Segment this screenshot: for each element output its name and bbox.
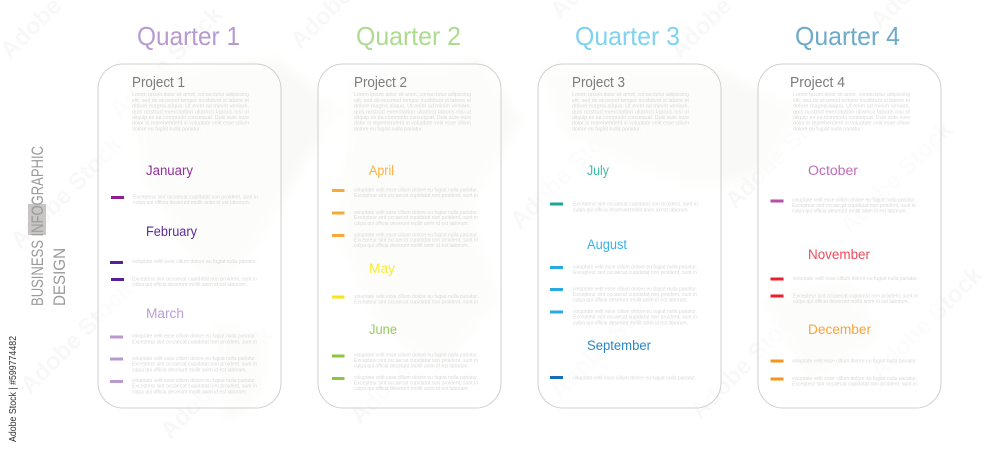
marker: february 2 xyxy=(111,278,124,281)
august notes: Excepteur sint occaecat cupidatat non proident, sunt in xyxy=(573,292,697,298)
project description: dolor in reprehenderit in voluptate velit esse cillum xyxy=(132,120,249,126)
april notes: voluptate velit esse cillum dolore eu fugiat nulla pariatur. xyxy=(354,188,478,194)
november notes: Excepteur sint occaecat cupidatat non proident, sunt in xyxy=(793,294,918,300)
march notes: Excepteur sint occaecat cupidatat non proident, sunt in xyxy=(132,340,257,346)
background: world map and watermark: Adobe Stock xyxy=(545,281,668,404)
project description: dolore magna aliqua. Ut enim ad minim veniam, xyxy=(793,104,910,110)
background: world map and watermark: Adobe Stock xyxy=(685,301,808,424)
marker: february 1 xyxy=(110,261,123,264)
february notes xyxy=(132,259,257,288)
background: world map and watermark: Adobe Stock xyxy=(505,111,628,234)
august notes: voluptate velit esse cillum dolore eu fugiat nulla pariatur. xyxy=(573,264,697,270)
june notes: culpa qui officia deserunt mollit anim id est laborum. xyxy=(354,364,469,370)
markers: april xyxy=(332,189,344,237)
april notes xyxy=(354,188,478,249)
project description: Lorem ipsum dolor sit amet, consectetur adipiscing xyxy=(132,92,249,98)
project description xyxy=(354,92,472,132)
january notes: Excepteur sint occaecat cupidatat non proident, sunt in xyxy=(133,194,258,200)
project title: Project 3 xyxy=(572,75,625,91)
panel: project 1 xyxy=(98,64,281,408)
background: world map and watermark: Adobe Stock xyxy=(105,1,228,124)
project description: aliquip ex ea commodo consequat. Duis aute irure xyxy=(793,115,910,121)
june notes: voluptate velit esse cillum dolore eu fugiat nulla pariatur. xyxy=(354,375,478,381)
april notes: voluptate velit esse cillum dolore eu fugiat nulla pariatur. xyxy=(354,232,478,238)
project description: dolore eu fugiat nulla pariatur. xyxy=(572,126,641,132)
month: april: April xyxy=(369,163,394,178)
project title: Project 4 xyxy=(790,75,845,91)
side title: business infographic design: BUSINESS INFOGRAPHIC xyxy=(28,146,47,306)
month: january: January xyxy=(146,163,193,178)
marker: september xyxy=(550,376,563,379)
february notes: voluptate velit esse cillum dolore eu fugiat nulla pariatur. xyxy=(132,259,257,265)
month: july: July xyxy=(587,163,609,178)
background: world map and watermark: Adobe Stock xyxy=(175,111,298,234)
november notes: culpa qui officia deserunt mollit anim id est laborum. xyxy=(793,299,909,305)
month: october: October xyxy=(808,163,859,178)
february notes: culpa qui officia deserunt mollit anim id est laborum. xyxy=(132,282,247,288)
august notes xyxy=(573,264,697,326)
april notes: culpa qui officia deserunt mollit anim id est laborum. xyxy=(354,243,469,249)
march notes: Excepteur sint occaecat cupidatat non proident, sunt in xyxy=(132,362,257,368)
project description: dolor in reprehenderit in voluptate velit esse cillum xyxy=(354,120,471,126)
side title: business infographic design: DESIGN xyxy=(50,248,69,306)
stock id label: Adobe Stock | #599774482 xyxy=(7,336,19,442)
december notes: voluptate velit esse cillum dolore eu fugiat nulla pariatur. xyxy=(792,358,917,364)
october notes xyxy=(792,198,916,214)
march notes: voluptate velit esse cillum dolore eu fugiat nulla pariatur. xyxy=(132,356,256,362)
markers: november xyxy=(770,278,784,298)
january notes: culpa qui officia deserunt mollit anim id est laborum. xyxy=(133,200,250,206)
may notes xyxy=(354,294,478,306)
project description: dolore magna aliqua. Ut enim ad minim veniam, xyxy=(132,104,249,110)
april notes: culpa qui officia deserunt mollit anim id est laborum. xyxy=(354,221,469,227)
background: world map and watermark: Adobe Stock xyxy=(385,111,508,234)
may notes: voluptate velit esse cillum dolore eu fugiat nulla pariatur. xyxy=(354,294,478,300)
project description: elit, sed do eiusmod tempor incididunt ut labore et xyxy=(793,98,911,104)
project title: Project 1 xyxy=(132,75,185,91)
july notes: culpa qui officia deserunt mollit anim id est laborum. xyxy=(573,208,689,214)
november notes xyxy=(793,276,918,305)
august notes: culpa qui officia deserunt mollit anim id est laborum. xyxy=(573,320,688,326)
project description: Lorem ipsum dolor sit amet, consectetur adipiscing xyxy=(354,92,471,98)
june notes: culpa qui officia deserunt mollit anim id est laborum. xyxy=(354,386,469,392)
august notes: voluptate velit esse cillum dolore eu fugiat nulla pariatur. xyxy=(573,286,697,292)
april notes: Excepteur sint occaecat cupidatat non proident, sunt in xyxy=(354,238,478,244)
project description: quis nostrud exercitation ullamco laboris nisi ut xyxy=(572,110,690,116)
heading: quarter 2: Quarter 2 xyxy=(356,21,461,51)
project title: Project 2 xyxy=(354,75,407,91)
marker: january xyxy=(111,196,124,199)
project description: dolor in reprehenderit in voluptate velit esse cillum xyxy=(793,120,910,126)
marker: july xyxy=(550,202,563,206)
december notes xyxy=(792,358,917,388)
side title: business infographic design xyxy=(28,146,69,306)
december notes: Excepteur sint occaecat cupidatat non proident, sunt in xyxy=(792,382,917,388)
heading: quarter 3: Quarter 3 xyxy=(575,21,680,51)
march notes: Excepteur sint occaecat cupidatat non proident, sunt in xyxy=(132,384,257,390)
background: world map and watermark: Adobe Stock xyxy=(865,261,988,384)
june notes: Excepteur sint occaecat cupidatat non proident, sunt in xyxy=(354,358,478,364)
august notes: Excepteur sint occaecat cupidatat non proident, sunt in xyxy=(573,270,697,276)
project description: dolore eu fugiat nulla pariatur. xyxy=(132,126,201,132)
project description: dolor in reprehenderit in voluptate velit esse cillum xyxy=(572,120,689,126)
march notes: voluptate velit esse cillum dolore eu fugiat nulla pariatur. xyxy=(132,334,256,340)
project description: Lorem ipsum dolor sit amet, consectetur adipiscing xyxy=(572,92,689,98)
month: may: May xyxy=(369,261,395,276)
project description xyxy=(572,92,690,132)
project description: elit, sed do eiusmod tempor incididunt ut labore et xyxy=(132,98,250,104)
project description xyxy=(793,92,911,132)
month: june: June xyxy=(369,322,397,337)
markers: december xyxy=(770,360,784,380)
project description: quis nostrud exercitation ullamco laboris nisi ut xyxy=(793,110,911,116)
october notes: Excepteur sint occaecat cupidatat non proident, sunt in xyxy=(792,203,916,209)
month: august: August xyxy=(587,237,627,252)
background: world map and watermark: Adobe Stock xyxy=(5,131,128,254)
march notes xyxy=(132,334,257,396)
project description: aliquip ex ea commodo consequat. Duis aute irure xyxy=(354,115,471,121)
july notes xyxy=(573,202,698,214)
project description: Lorem ipsum dolor sit amet, consectetur adipiscing xyxy=(793,92,910,98)
project description: elit, sed do eiusmod tempor incididunt ut labore et xyxy=(354,98,472,104)
project description: dolore magna aliqua. Ut enim ad minim veniam, xyxy=(354,104,471,110)
project description: elit, sed do eiusmod tempor incididunt ut labore et xyxy=(572,98,690,104)
month: september: September xyxy=(587,338,651,353)
month: november: November xyxy=(808,247,870,262)
project description: dolore magna aliqua. Ut enim ad minim veniam, xyxy=(572,104,689,110)
project description: aliquip ex ea commodo consequat. Duis aute irure xyxy=(132,115,249,121)
panel: project 2 xyxy=(318,64,501,408)
project description: dolore eu fugiat nulla pariatur. xyxy=(354,126,423,132)
marker: may xyxy=(332,296,344,298)
january notes xyxy=(133,194,258,206)
background: world map and watermark: Adobe Stock xyxy=(720,91,843,214)
heading: quarter 1: Quarter 1 xyxy=(137,21,240,51)
project description: quis nostrud exercitation ullamco laboris nisi ut xyxy=(354,110,472,116)
december notes: voluptate velit esse cillum dolore eu fugiat nulla pariatur. xyxy=(792,376,917,382)
may notes: Excepteur sint occaecat cupidatat non proident, sunt in xyxy=(354,300,478,306)
month: february: February xyxy=(146,224,197,239)
june notes xyxy=(354,352,478,392)
project description: quis nostrud exercitation ullamco laboris nisi ut xyxy=(132,110,250,116)
background: world map and watermark: Adobe Stock xyxy=(835,116,958,239)
background: world map and watermark: Adobe Stock xyxy=(155,321,278,444)
heading: quarter 4: Quarter 4 xyxy=(795,21,900,51)
august notes: voluptate velit esse cillum dolore eu fugiat nulla pariatur. xyxy=(573,309,697,315)
march notes: culpa qui officia deserunt mollit anim id est laborum. xyxy=(132,390,247,396)
september notes: voluptate velit esse cillum dolore eu fugiat nulla pariatur. xyxy=(572,376,696,382)
march notes: voluptate velit esse cillum dolore eu fugiat nulla pariatur. xyxy=(132,378,256,384)
project description: dolore eu fugiat nulla pariatur. xyxy=(793,126,862,132)
month: march: March xyxy=(146,306,184,321)
august notes: culpa qui officia deserunt mollit anim id est laborum. xyxy=(573,298,688,304)
october notes: voluptate velit esse cillum dolore eu fugiat nulla pariatur. xyxy=(792,198,916,204)
background: world map and watermark: Adobe Stock xyxy=(345,306,468,429)
february notes: Excepteur sint occaecat cupidatat non proident, sunt in xyxy=(132,276,257,282)
june notes: voluptate velit esse cillum dolore eu fugiat nulla pariatur. xyxy=(354,352,478,358)
background: world map and watermark: Adobe Stock xyxy=(15,276,138,399)
panel: project 4 xyxy=(758,64,941,408)
project description: aliquip ex ea commodo consequat. Duis aute irure xyxy=(572,115,689,121)
april notes: voluptate velit esse cillum dolore eu fugiat nulla pariatur. xyxy=(354,210,478,216)
march notes: culpa qui officia deserunt mollit anim id est laborum. xyxy=(132,368,247,374)
markers: june xyxy=(332,354,344,380)
project description xyxy=(132,92,250,132)
august notes: Excepteur sint occaecat cupidatat non proident, sunt in xyxy=(573,314,697,320)
month: december: December xyxy=(808,322,872,337)
marker: october xyxy=(770,200,784,202)
markers: august xyxy=(550,266,563,314)
june notes: Excepteur sint occaecat cupidatat non proident, sunt in xyxy=(354,380,478,386)
panel: project 3 xyxy=(538,64,721,408)
april notes: Excepteur sint occaecat cupidatat non proident, sunt in xyxy=(354,215,478,221)
april notes: Excepteur sint occaecat cupidatat non proident, sunt in xyxy=(354,193,478,199)
october notes: culpa qui officia deserunt mollit anim id est laborum. xyxy=(792,208,907,214)
november notes: voluptate velit esse cillum dolore eu fugiat nulla pariatur. xyxy=(793,276,918,282)
july notes: Excepteur sint occaecat cupidatat non proident, sunt in xyxy=(573,202,698,208)
markers: march xyxy=(110,336,123,383)
